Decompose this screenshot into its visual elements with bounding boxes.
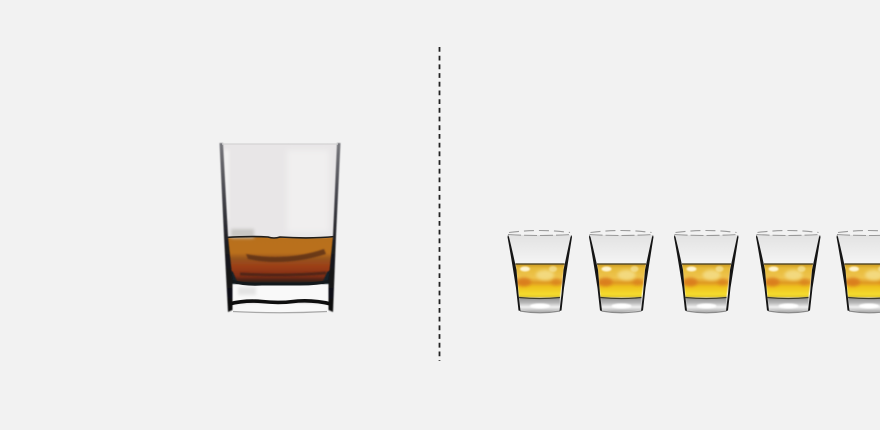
clear glass base [231,281,329,302]
bottom foot [231,304,329,314]
shot glass 3 [674,230,738,313]
shot glass 5 [836,230,880,313]
glass body [221,144,339,304]
shot glass 2 [589,230,654,313]
dark corner left [229,270,238,284]
glass highlight [287,150,329,232]
shot glass 1 [508,230,572,313]
base black line [229,301,331,304]
liquid lower band [240,272,326,277]
amber liquid [226,237,334,284]
dark corner right [322,270,331,284]
rim [222,143,338,145]
liquid top line [225,236,335,238]
shot glass 4 [756,230,820,313]
right wall [328,143,340,312]
base smudge [238,287,256,295]
liquid dark band [246,249,326,262]
light inner band near left wall [224,150,229,220]
dark line under liquid [231,281,330,284]
large whisky tumbler [220,143,340,314]
dashed divider [438,47,440,361]
smudge above liquid [231,229,254,238]
left wall [220,143,232,312]
